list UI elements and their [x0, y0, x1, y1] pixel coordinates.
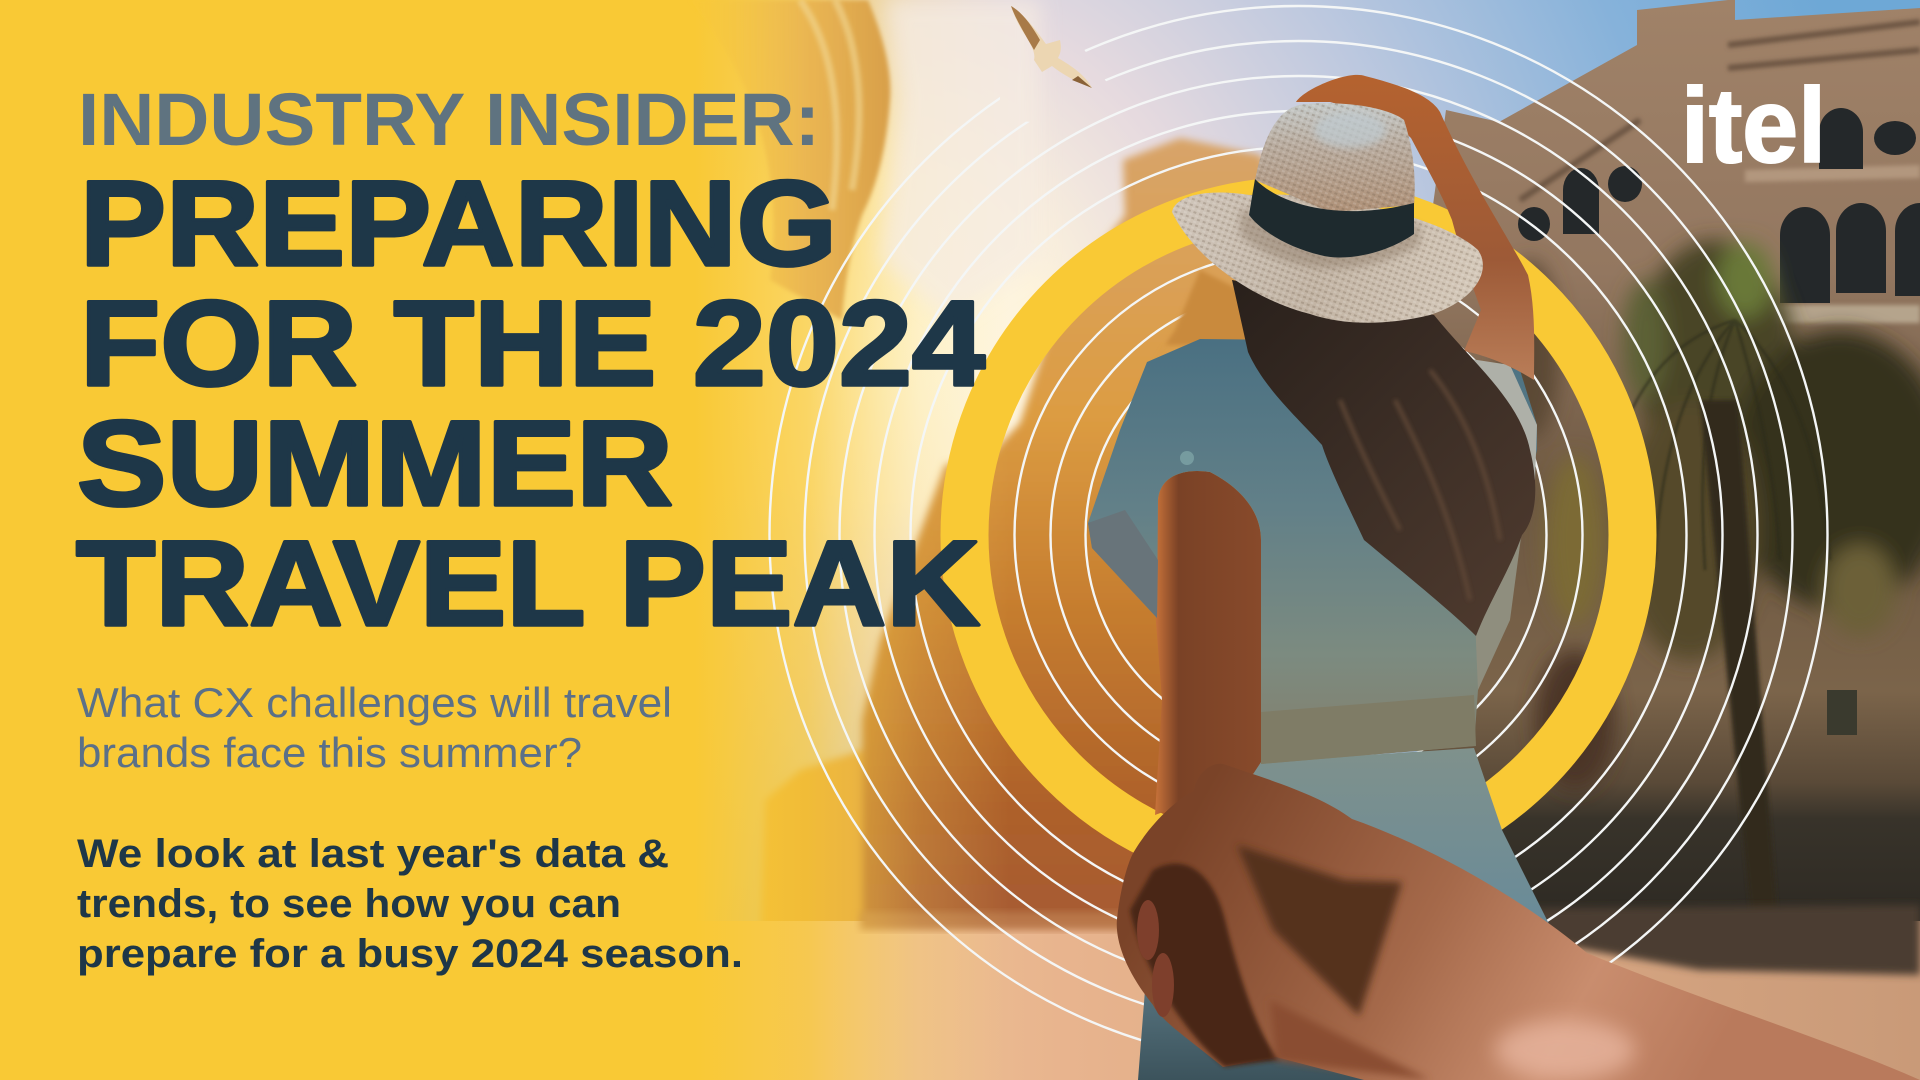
- icon: straw hat: [1172, 103, 1483, 323]
- subheading question: [77, 679, 672, 776]
- icon: seagull: [1011, 6, 1092, 88]
- right cathedral building: [1420, 0, 1920, 930]
- hat brim: [1172, 192, 1483, 323]
- main title: TRAVEL PEAK: [76, 515, 980, 651]
- yellow fade over photograph: [0, 0, 1010, 1080]
- subheading question: What CX challenges will travel: [77, 679, 672, 726]
- golden back-lit hair: [1130, 270, 1262, 400]
- body statement: trends, to see how you can: [77, 882, 621, 926]
- palm fronds: [1610, 320, 1830, 570]
- eyebrow heading: INDUSTRY INSIDER:: [78, 78, 820, 161]
- main title: SUMMER: [77, 395, 673, 531]
- body statement: prepare for a busy 2024 season.: [77, 932, 743, 976]
- skirt: [1138, 748, 1560, 1080]
- body statement: [77, 832, 743, 976]
- main title: FOR THE 2024: [80, 275, 985, 411]
- hand-holding foreground arm: [1117, 764, 1920, 1080]
- cornice bands: [1520, 22, 1920, 200]
- main title: [76, 155, 985, 651]
- subheading question: brands face this summer?: [77, 729, 582, 776]
- pale sky glow above the fade: [880, 0, 1040, 320]
- illustration: woman from behind: [1088, 75, 1920, 1080]
- distant sunlit buildings: [760, 138, 1320, 935]
- body statement: We look at last year's data &: [77, 832, 669, 876]
- logo: itel: itel: [1681, 67, 1826, 185]
- long dark hair: [1232, 280, 1535, 636]
- palm trees: [1500, 240, 1920, 790]
- main title: PREPARING: [80, 155, 837, 291]
- hat crown: [1255, 103, 1415, 212]
- hat band: [1249, 179, 1414, 257]
- palm trunk: [1700, 400, 1782, 977]
- ground: [600, 905, 1920, 1080]
- concentric white rings: [770, 6, 1828, 1064]
- yellow circle ring: [964, 201, 1632, 869]
- arched windows: [1518, 108, 1920, 303]
- shirt: [1088, 339, 1537, 764]
- raised arm and hand: [1296, 75, 1534, 380]
- curved building top left: [690, 0, 890, 320]
- lower left arm: [1155, 471, 1261, 815]
